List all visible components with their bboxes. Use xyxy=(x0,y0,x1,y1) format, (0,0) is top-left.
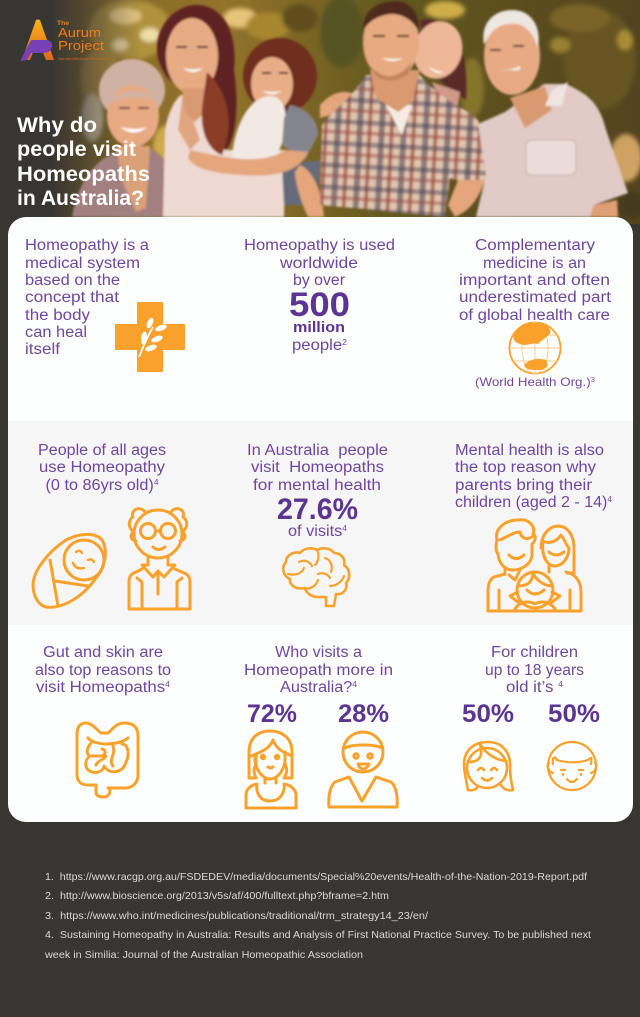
text: mental health children xyxy=(455,442,613,511)
title: in Australia? xyxy=(17,187,144,210)
text: people of all ages: 4 xyxy=(154,478,159,487)
text: complementary medicine: underestimated part xyxy=(459,289,612,306)
text: homeopathy definition xyxy=(25,237,149,358)
text: for children xyxy=(485,644,584,696)
icon: swaddled baby xyxy=(33,534,105,607)
text: who visits xyxy=(244,644,393,696)
text: gut and skin: 4 xyxy=(165,680,171,689)
icon: girl xyxy=(464,742,513,790)
text: homeopathy definition: Homeopathy is a xyxy=(25,237,149,254)
text: mental health children: children (aged 2 - 14) xyxy=(455,494,602,511)
text: for children: old it’s xyxy=(506,679,550,696)
text: who visits: 4 xyxy=(352,680,358,689)
text: world health org: 3 xyxy=(591,377,595,384)
text: who visits: Australia? xyxy=(280,679,349,696)
references list: 1. https://www.racgp.org.au/FSDEDEV/media/documents/Special%20events/Health-of-the-Nation-2019-Report.pdf xyxy=(45,871,587,883)
icon: boy xyxy=(548,742,596,790)
text: complementary medicine: medicine is an xyxy=(483,255,586,272)
child xyxy=(243,38,317,114)
text: used worldwide, 500 million people: Homeopathy is used xyxy=(244,237,395,254)
text: people of all ages xyxy=(38,442,166,494)
text: complementary medicine: important and often xyxy=(459,272,610,289)
text: mental health visits: of visits xyxy=(288,523,340,540)
text: mental health visits: for mental health xyxy=(253,477,381,494)
text: gut and skin: Gut and skin are xyxy=(43,644,163,661)
title xyxy=(17,114,150,210)
stat: 72 percent women: 72% xyxy=(247,700,297,728)
text: complementary medicine: of global health care xyxy=(459,307,610,324)
icon: family xyxy=(488,520,581,611)
text: who visits: Homeopath more in xyxy=(244,662,393,679)
icon: intestines xyxy=(77,723,138,797)
text: used worldwide, 500 million people: million xyxy=(293,319,345,336)
header photo: family group xyxy=(0,0,640,224)
text: who visits: Who visits a xyxy=(275,644,362,661)
grandmother xyxy=(71,147,166,217)
icon: brain xyxy=(283,548,349,606)
references list: week in Similia: Journal of the Australian Homeopathic Association xyxy=(44,949,363,961)
text: homeopathy definition: can heal xyxy=(25,324,87,341)
text: homeopathy definition: the body xyxy=(25,307,90,324)
title: Why do xyxy=(17,114,97,137)
man xyxy=(320,75,487,217)
text: homeopathy definition: medical system xyxy=(25,255,140,272)
text: used worldwide, 500 million people: by over xyxy=(293,272,345,289)
references list: 2. http://www.bioscience.org/2013/v5s/af/400/fulltext.php?bframe=2.htm xyxy=(45,890,389,902)
text: complementary medicine xyxy=(459,237,612,324)
text: gut and skin: visit Homeopaths xyxy=(36,679,155,696)
logo: The Aurum Project: The xyxy=(57,20,69,27)
icon: man xyxy=(329,732,397,807)
text: mental health children: 4 xyxy=(607,495,613,504)
text: mental health visits: In Australia people xyxy=(247,442,388,459)
text: used worldwide, 500 million people: people xyxy=(292,337,339,354)
text: people of all ages: (0 to 86yrs old) xyxy=(46,477,149,494)
text: people of all ages: use Homeopathy xyxy=(39,459,165,476)
text: used worldwide, 500 million people: 2 xyxy=(342,338,348,347)
grandfather xyxy=(476,84,628,217)
title: Homeopaths xyxy=(17,163,150,186)
woman xyxy=(157,5,237,155)
text: world health org: (World Health Org.) xyxy=(475,375,579,389)
text: mental health visits: 27.6% xyxy=(277,493,358,526)
text: mental health children: Mental health is also xyxy=(455,442,604,459)
girl behind man xyxy=(420,19,466,100)
references list: 4. Sustaining Homeopathy in Australia: Results and Analysis of First National Practice Survey. To be published next xyxy=(45,929,591,941)
text: used worldwide, 500 million people xyxy=(244,237,395,354)
stat: 28 percent men: 28% xyxy=(338,700,389,728)
text: gut and skin: also top reasons to xyxy=(35,662,171,679)
logo: The Aurum Project xyxy=(20,20,108,61)
icon: grandfather xyxy=(129,509,190,609)
text: for children: 4 xyxy=(558,680,564,689)
text: people of all ages: People of all ages xyxy=(38,442,166,459)
stat: 50 percent girls: 50% xyxy=(462,700,514,728)
icon: globe xyxy=(510,322,560,374)
text: homeopathy definition: concept that xyxy=(25,289,120,306)
text: homeopathy definition: itself xyxy=(25,341,61,358)
text: for children: up to 18 years xyxy=(485,662,584,679)
references list: 3. https://www.who.int/medicines/publications/traditional/trm_strategy14_23/en/ xyxy=(45,910,428,922)
text: mental health visits: 4 xyxy=(342,524,348,533)
stat: 50 percent boys: 50% xyxy=(548,700,600,728)
text: homeopathy definition: based on the xyxy=(25,272,120,289)
logo: The Aurum Project: Project xyxy=(58,38,104,53)
text: used worldwide, 500 million people: 500 xyxy=(289,286,350,324)
text: for children: For children xyxy=(491,644,578,661)
logo: The Aurum Project: Aurum xyxy=(58,25,101,40)
text: mental health children: the top reason why xyxy=(455,459,596,476)
logo: The Aurum Project: Natural Medicine Research xyxy=(58,57,108,61)
icon: woman xyxy=(246,731,296,808)
main white panel xyxy=(8,217,633,822)
references list xyxy=(44,871,591,961)
text: gut and skin xyxy=(35,644,171,696)
title: people visit xyxy=(17,138,136,161)
text: mental health visits xyxy=(247,442,388,540)
text: complementary medicine: Complementary xyxy=(475,237,595,254)
text: mental health children: parents bring their xyxy=(455,477,592,494)
text: used worldwide, 500 million people: worldwide xyxy=(279,255,358,272)
text: mental health visits: visit Homeopaths xyxy=(251,459,384,476)
icon: medical cross with leaf xyxy=(115,302,185,372)
